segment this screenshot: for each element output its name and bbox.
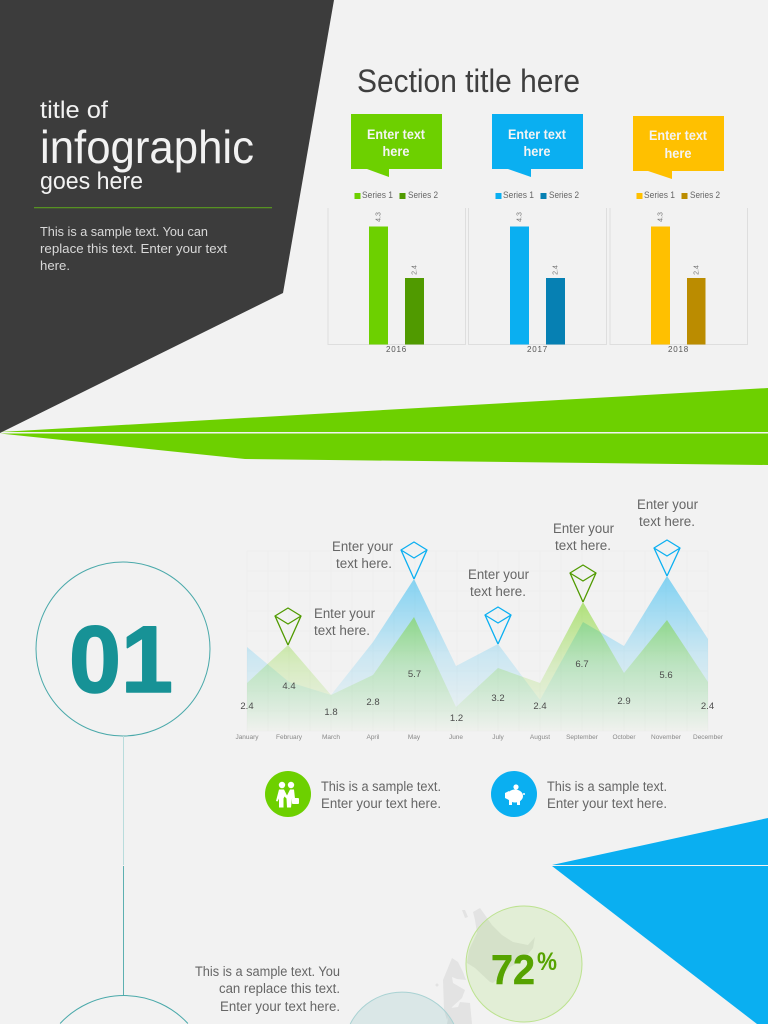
legend 2018: Series 1 xyxy=(644,190,675,200)
annotation: February: Enter your xyxy=(314,606,375,621)
panel: 2018 bar chart: 2018 xyxy=(668,345,689,354)
callout: yellow: here xyxy=(664,145,692,161)
month axis labels: November xyxy=(651,734,682,741)
legend 2017: Series 1 xyxy=(503,190,534,200)
text: handshake caption: Enter your text here. xyxy=(321,796,441,811)
text: lower description xyxy=(195,964,340,1014)
annotation: September: text here. xyxy=(555,538,611,553)
annotation: July: text here. xyxy=(470,584,526,599)
annotation: November xyxy=(637,497,698,529)
marker: November xyxy=(654,540,680,576)
month axis labels: January xyxy=(235,734,259,741)
annotation: February xyxy=(314,606,375,638)
circle stat: 72%: 72 xyxy=(491,946,535,993)
data labels: 2.4 xyxy=(701,701,714,712)
annotation: July: Enter your xyxy=(468,567,529,582)
month axis labels: May xyxy=(408,734,421,741)
title description text xyxy=(40,224,227,273)
annotation: May xyxy=(332,539,393,571)
month axis labels: October xyxy=(612,734,636,741)
month axis labels: June xyxy=(449,734,463,741)
data labels: 4.4 xyxy=(282,681,296,692)
panel: 2017 bar chart: 2017 xyxy=(527,345,548,354)
title xyxy=(40,97,254,195)
text: lower description: Enter your text here. xyxy=(220,999,340,1014)
legend 2016: Series 2 xyxy=(408,190,438,200)
text: piggy bank caption: Enter your text here. xyxy=(547,796,667,811)
callout: blue: Enter text xyxy=(508,126,566,142)
text: lower description: This is a sample text. You xyxy=(195,964,340,979)
data labels: 3.2 xyxy=(491,693,505,704)
legend 2016 xyxy=(354,190,438,200)
connector line xyxy=(122,736,124,996)
map: islands xyxy=(436,908,535,1024)
icon: handshake xyxy=(265,771,311,817)
month axis labels: March xyxy=(322,734,340,741)
text: lower description: can replace this text. xyxy=(219,981,340,996)
marker: September xyxy=(570,565,596,602)
text: handshake caption xyxy=(321,779,441,811)
marker: February xyxy=(275,608,301,645)
panel: dark title shape xyxy=(0,0,334,433)
bars 2016 xyxy=(369,226,424,344)
number circle 01 xyxy=(36,562,210,736)
title: infographic xyxy=(40,121,254,173)
icon: piggy bank xyxy=(491,771,537,817)
month axis labels: February xyxy=(276,734,303,741)
legend 2016: Series 1 xyxy=(362,190,393,200)
annotation: September: Enter your xyxy=(553,521,614,536)
title: title of xyxy=(40,97,108,124)
number circle 01: 01 xyxy=(69,607,173,713)
panel: 2016 bar chart: 2016 xyxy=(386,345,407,354)
value labels 2017: 2.4 xyxy=(552,265,560,275)
annotation: February: text here. xyxy=(314,623,370,638)
legend 2017 xyxy=(496,190,579,200)
annotation: July xyxy=(468,567,529,599)
legend 2017: Series 2 xyxy=(549,190,579,200)
month axis labels xyxy=(235,734,724,741)
month axis labels: July xyxy=(492,734,505,741)
callout: blue xyxy=(492,114,583,177)
circle stat: 72%: % xyxy=(537,948,557,976)
number circle 02 xyxy=(60,996,188,1024)
data labels: 5.7 xyxy=(408,669,421,680)
title description text: here. xyxy=(40,258,70,273)
callout: green: Enter text xyxy=(367,126,425,142)
callout: blue: here xyxy=(524,143,551,159)
value labels 2016: 2.4 xyxy=(412,265,418,275)
data labels: 2.4 xyxy=(240,701,254,712)
blue wedge divider xyxy=(552,818,768,1024)
marker: July xyxy=(485,607,511,644)
panel: 2016 bar chart xyxy=(328,114,466,354)
title: goes here xyxy=(40,168,143,195)
panel: 2017 bar chart xyxy=(468,114,606,354)
value labels 2018 xyxy=(658,212,700,275)
data labels: 6.7 xyxy=(575,659,589,670)
annotation: May: text here. xyxy=(336,556,392,571)
callout: green: here xyxy=(382,143,410,159)
value labels 2017: 4.3 xyxy=(516,212,524,222)
text: piggy bank caption: This is a sample text. xyxy=(547,779,667,794)
data labels: 2.4 xyxy=(533,701,547,712)
area chart xyxy=(235,551,724,741)
data labels: 1.2 xyxy=(450,713,463,724)
circle outline: lower teal xyxy=(350,992,454,1024)
value labels 2018: 2.4 xyxy=(694,265,700,275)
green wedge divider xyxy=(0,388,768,465)
circle stat: lower teal xyxy=(350,992,454,1024)
legend 2018: Series 2 xyxy=(690,190,720,200)
title description text: replace this text. Enter your text xyxy=(40,241,227,256)
month axis labels: April xyxy=(366,734,380,741)
callout: yellow: Enter text xyxy=(649,127,707,143)
value labels 2018: 4.3 xyxy=(658,212,664,222)
bars 2017 xyxy=(510,226,565,344)
circle stat: 72% xyxy=(466,906,582,1022)
data labels: 1.8 xyxy=(324,707,338,718)
legend 2018 xyxy=(636,190,720,200)
callout: green xyxy=(351,114,442,177)
marker: May xyxy=(401,542,427,579)
text: piggy bank caption xyxy=(547,779,667,811)
month axis labels: August xyxy=(530,734,550,741)
data labels xyxy=(240,659,714,724)
callout: yellow xyxy=(633,116,724,179)
annotation: September xyxy=(553,521,614,553)
series 2 area xyxy=(247,602,708,731)
section heading: Section title here xyxy=(357,63,580,99)
bars 2018 xyxy=(651,226,706,344)
data labels: 2.9 xyxy=(617,696,631,707)
month axis labels: September xyxy=(566,734,599,741)
data labels: 2.8 xyxy=(366,697,380,708)
series 1 area xyxy=(247,576,708,731)
value labels 2016 xyxy=(376,212,418,275)
annotation: November: Enter your xyxy=(637,497,698,512)
text: handshake caption: This is a sample text. xyxy=(321,779,441,794)
annotation: November: text here. xyxy=(639,514,695,529)
value labels 2016: 4.3 xyxy=(376,212,382,222)
panel: 2018 bar chart xyxy=(610,116,748,354)
annotation: May: Enter your xyxy=(332,539,393,554)
value labels 2017 xyxy=(516,212,560,275)
title description text: This is a sample text. You can xyxy=(40,224,208,239)
month axis labels: December xyxy=(693,734,724,741)
data labels: 5.6 xyxy=(659,670,673,681)
